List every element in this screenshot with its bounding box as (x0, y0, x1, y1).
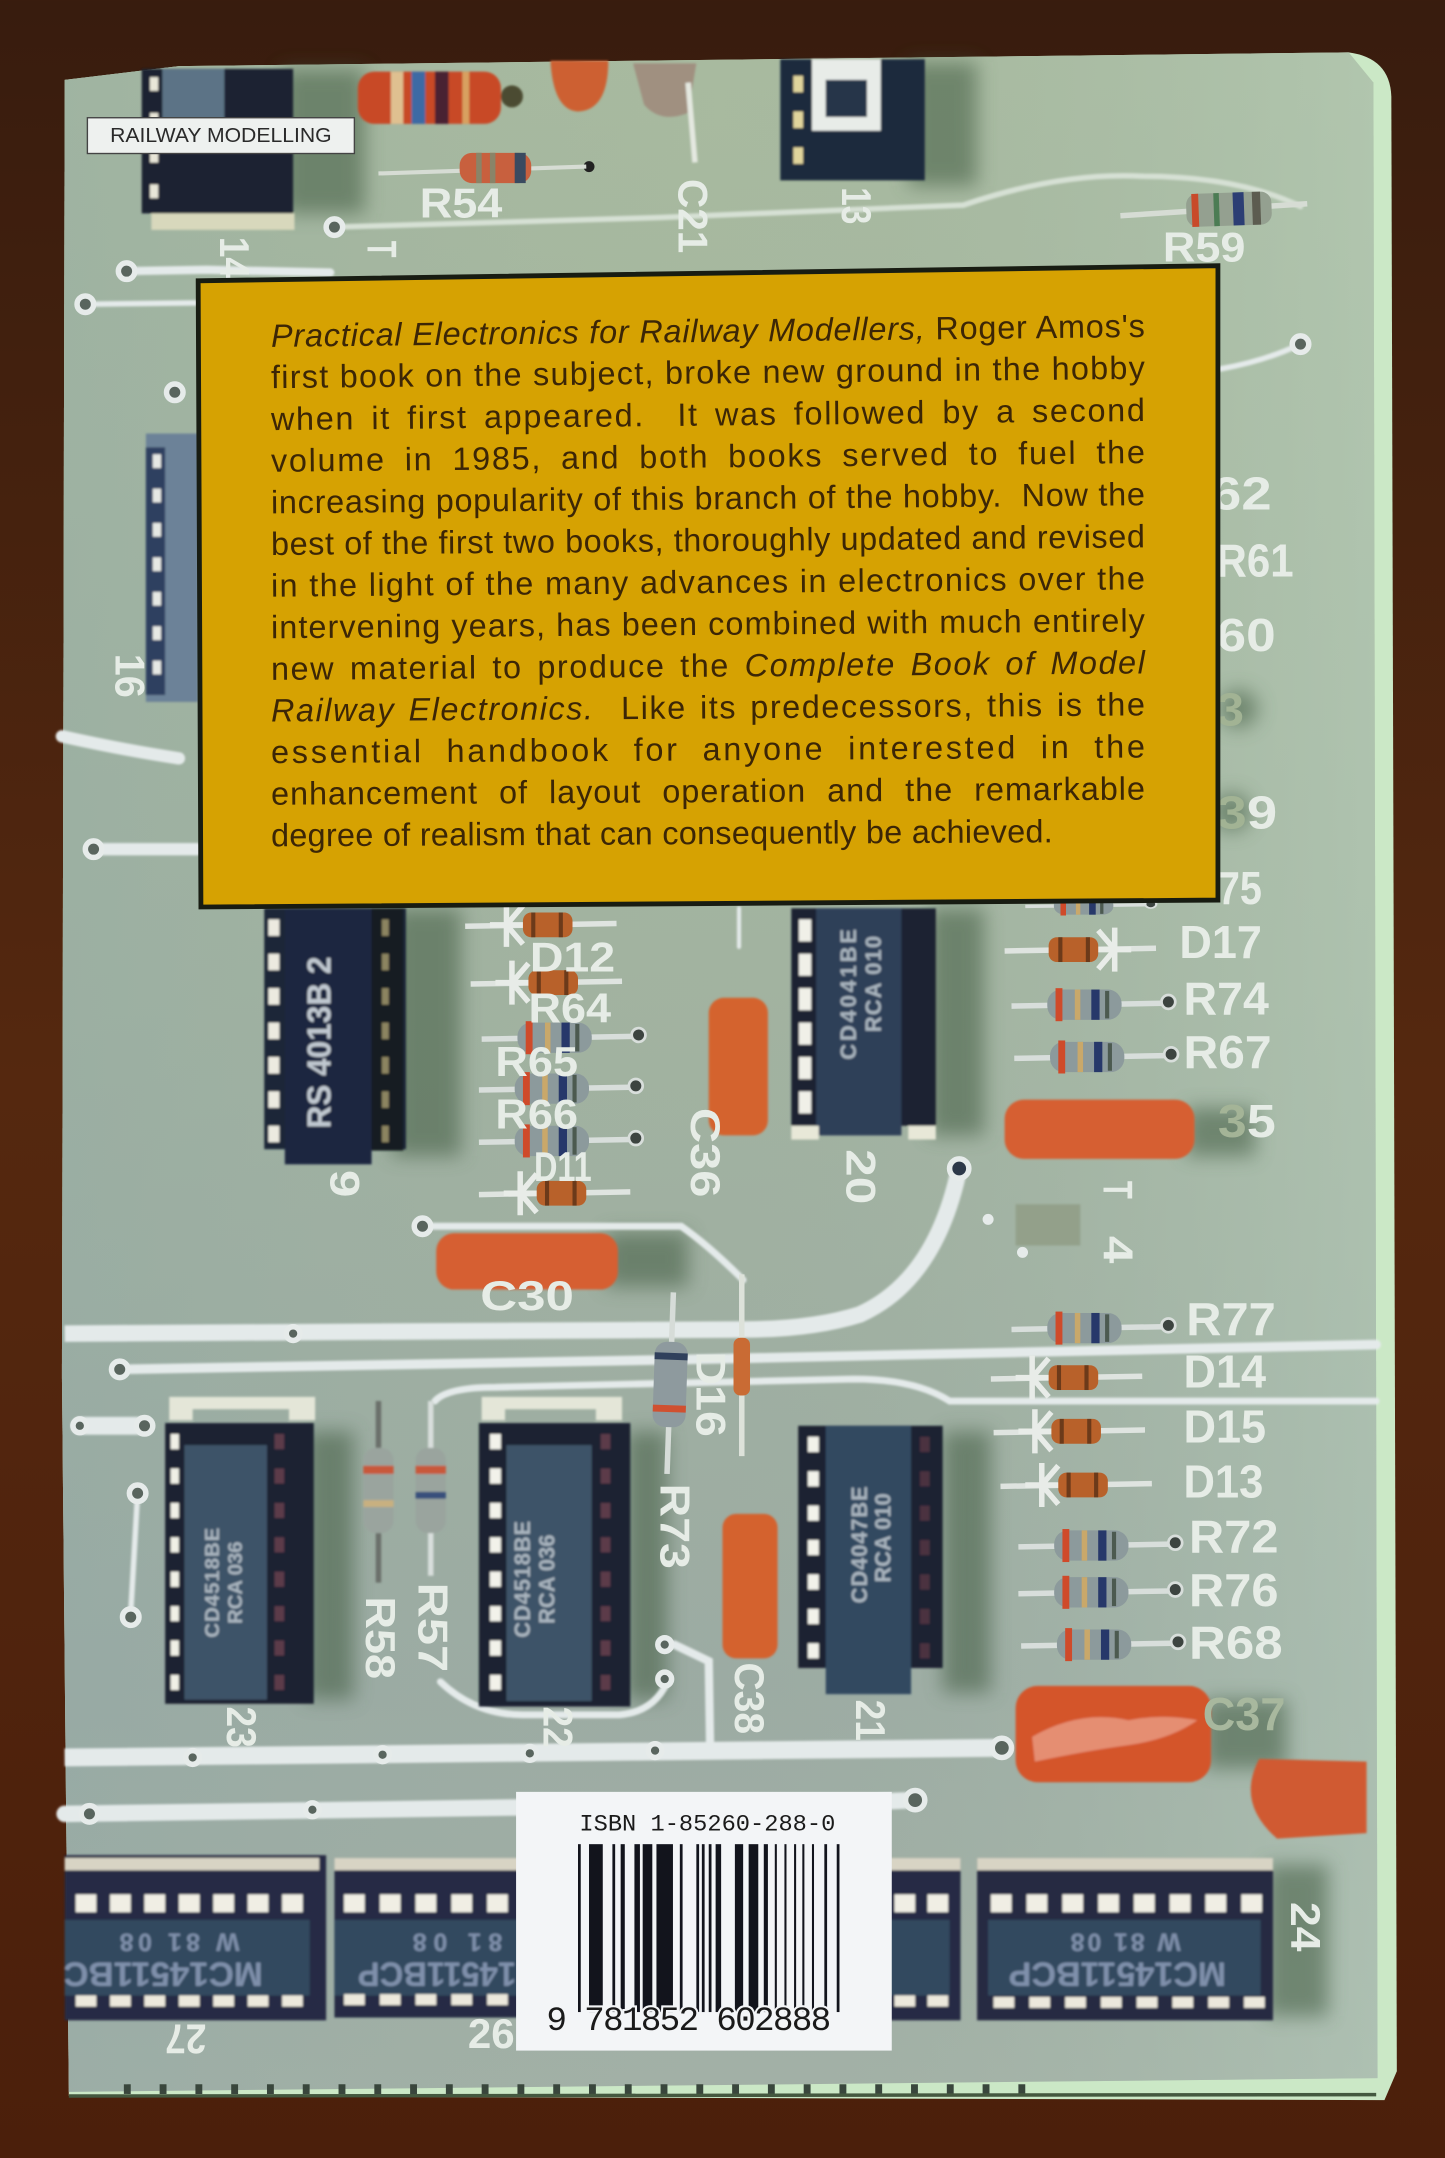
printed component labels: D15 (1184, 1400, 1266, 1452)
capacitor C35 (1005, 1100, 1195, 1159)
blurb text: Railway Electronics. Like its predecessors, this is the (271, 686, 1145, 729)
resistor R54 (378, 153, 586, 183)
printed component labels: R72 (1189, 1510, 1278, 1562)
IC chip 21: CD4047BE (847, 1486, 872, 1603)
printed component labels: 21 (847, 1700, 893, 1741)
printed component labels: R66 (495, 1092, 578, 1138)
IC chip 16 left (146, 434, 198, 702)
IC chip 24 bottom: W 81 08 (1070, 1928, 1181, 1955)
vertical resistors R58 and R57 (363, 1401, 446, 1583)
printed component labels: 13 (833, 187, 879, 224)
printed component labels: R65 (495, 1039, 578, 1085)
printed component labels: R76 (1189, 1564, 1278, 1616)
printed component labels: 35 (1218, 1095, 1276, 1147)
printed component labels: 9 (321, 1170, 367, 1197)
printed component labels: D14 (1184, 1345, 1266, 1397)
IC chip 21 (798, 1426, 943, 1694)
IC chip 20: RCA 010 (861, 936, 886, 1032)
printed component labels: 62 (1211, 467, 1272, 519)
label: Railway Modelling category tag (87, 118, 354, 154)
transistor T4 pad (1016, 1204, 1080, 1246)
capacitor C30 (436, 1233, 618, 1290)
blurb text: when it first appeared. It was followed by a second (270, 392, 1145, 437)
printed component labels: D13 (1184, 1455, 1263, 1507)
lower right components: R77 D14 D15 D13 R72 R76 R68 (991, 1312, 1185, 1661)
IC chip 27 bottom: MC14511BC (63, 1955, 263, 1993)
IC chip 9 (264, 908, 406, 1164)
printed component labels: T (358, 241, 404, 257)
IC chip 9: RS 4013B 2 (300, 957, 337, 1129)
IC chip 26 bottom: 14511BCP (358, 1955, 516, 1993)
blurb text: in the light of the many advances in electronics over the (271, 560, 1145, 604)
capacitor top (550, 61, 608, 112)
printed component labels: 75 (1218, 862, 1262, 914)
circuit traces (62, 176, 1376, 1814)
IC chip 26 bottom: 81 08 (413, 1928, 502, 1955)
resistor large top (358, 72, 523, 124)
capacitor C36 (709, 998, 768, 1135)
printed component labels: D12 (530, 935, 615, 981)
IC chip 20 (791, 908, 936, 1140)
printed component labels: R73 (652, 1484, 698, 1569)
printed component labels: R68 (1189, 1616, 1283, 1668)
ISBN number: ISBN 1-85260-288-0 (579, 1812, 835, 1838)
printed component labels (107, 179, 1328, 2061)
capacitor C38 (722, 1514, 778, 1658)
printed component labels: 16 (107, 654, 153, 698)
IC chip 27 bottom: W 81 08 (120, 1928, 239, 1955)
IC chip 23: RCA 036 (224, 1541, 247, 1624)
capacitor lower right (1251, 1759, 1367, 1839)
ISBN barcode label (516, 1792, 892, 2051)
printed component labels: 4 (1095, 1236, 1141, 1263)
bottom edge perforation dots (124, 2086, 1053, 2093)
circuit board soft shadows (282, 62, 1328, 2016)
label: Railway Modelling category tag: RAILWAY MODELLING (110, 125, 332, 147)
IC chip 22: RCA 036 (535, 1535, 560, 1624)
blurb text: intervening years, has been combined with much entirely (271, 602, 1146, 645)
IC chip 23: CD4518BE (201, 1528, 224, 1638)
IC chip 21: RCA 010 (870, 1493, 895, 1583)
printed component labels: 26 (468, 2011, 515, 2057)
IC chip 24 bottom (977, 1858, 1273, 2020)
printed component labels: C21 (669, 179, 715, 253)
blurb text: essential handbook for anyone interested in the (271, 729, 1145, 770)
blurb text: degree of realism that can consequently be achieved. (271, 813, 1053, 853)
IC chip 22: CD4518BE (510, 1521, 535, 1638)
blurb text: volume in 1985, and both books served to fuel the (271, 434, 1145, 479)
printed component labels: 22 (535, 1707, 581, 1748)
printed component labels: C38 (726, 1663, 772, 1734)
resistor R59 (1120, 190, 1308, 229)
blurb text: enhancement of layout operation and the remarkable (271, 771, 1145, 812)
printed component labels: T (1095, 1181, 1141, 1199)
printed component labels: R57 (409, 1583, 455, 1672)
printed component labels: D16 (687, 1351, 733, 1437)
blurb text: best of the first two books, thoroughly updated and revised (271, 518, 1145, 562)
barcode bars (578, 1844, 839, 2012)
blurb text: increasing popularity of this branch of the hobby. Now the (271, 476, 1145, 520)
IC chip 20: CD4041BE (836, 929, 861, 1060)
printed component labels: 27 (165, 2015, 206, 2061)
blurb text: new material to produce the Complete Book of Model (271, 644, 1146, 687)
vertical resistor R73 (651, 1292, 690, 1474)
printed component labels: 39 (1217, 787, 1277, 839)
printed component labels: C30 (480, 1273, 574, 1319)
IC chip 14 top left (142, 69, 295, 230)
printed component labels: 24 (1282, 1902, 1328, 1952)
printed component labels: 20 (837, 1149, 883, 1204)
barcode digits: 9 781852 602888 (546, 2002, 831, 2041)
IC chip 27 bottom (63, 1855, 326, 2020)
printed component labels: R61 (1217, 535, 1294, 587)
printed component labels: 23 (218, 1707, 264, 1748)
bottom edge shadow line (69, 2095, 1376, 2096)
IC chip 25 partial bottom (881, 1858, 961, 2020)
printed component labels: R74 (1184, 972, 1269, 1024)
printed component labels: R58 (357, 1596, 403, 1679)
IC chip 24 bottom: MC14511BCP (1009, 1955, 1226, 1993)
printed component labels: R77 (1186, 1293, 1276, 1345)
vertical diode D16 (734, 1274, 750, 1456)
printed component labels: C37 (1203, 1688, 1285, 1740)
component column: diodes and resistors (465, 903, 645, 1215)
IC chip 22 (479, 1397, 630, 1707)
printed component labels: R59 (1163, 225, 1245, 271)
printed component labels: D17 (1179, 916, 1262, 968)
printed component labels: 14 (211, 237, 257, 278)
blurb text: Practical Electronics for Railway Modellers, Roger Amos's (271, 308, 1145, 354)
panel: blurb yellow box (198, 266, 1218, 907)
blurb text: first book on the subject, broke new ground in the hobby (271, 350, 1146, 395)
printed component labels: D11 (534, 1144, 592, 1190)
transparent component top (633, 63, 696, 162)
printed component labels: R54 (420, 181, 502, 227)
printed component labels: R67 (1184, 1026, 1272, 1078)
solder pads (73, 161, 1309, 1822)
printed component labels: R64 (528, 986, 611, 1032)
printed component labels: 60 (1217, 609, 1276, 661)
IC chip 23 (165, 1397, 315, 1704)
capacitor C37 (1016, 1686, 1211, 1782)
IC chip 26 bottom (334, 1858, 527, 2018)
printed component labels: 3 (1217, 683, 1244, 735)
component column right: D17 R74 R67 R75 (1005, 896, 1178, 1073)
printed component labels: C36 (682, 1108, 728, 1197)
IC chip 13 top (780, 59, 925, 180)
blurb text (270, 308, 1146, 853)
